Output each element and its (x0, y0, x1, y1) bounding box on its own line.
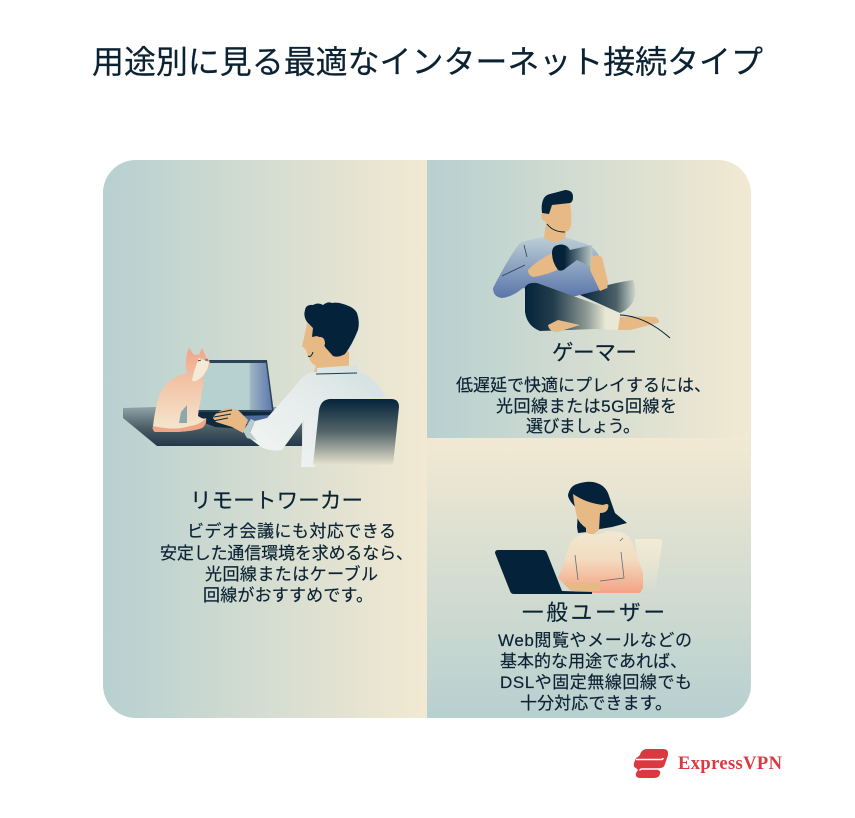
text: gamer body: 低遅延で快適にプレイするには、 (456, 376, 711, 395)
wordmark: ExpressVPN (678, 754, 783, 774)
office chair (313, 399, 399, 465)
icon: ExpressVPN mark (634, 749, 668, 778)
man (302, 323, 349, 372)
logo: ExpressVPN (634, 749, 783, 778)
panel: card background (103, 160, 751, 718)
text: remote worker body: 光回線またはケーブル (205, 564, 378, 584)
panel: gamer (456, 190, 711, 436)
heading: general user: 一般ユーザー (522, 601, 665, 625)
cat (153, 348, 210, 432)
text: general user body: 基本的な用途であれば、 (500, 652, 687, 671)
panel: remote worker (123, 302, 413, 605)
illustration: woman with laptop (495, 482, 662, 594)
text: general user body: 十分対応できます。 (520, 694, 672, 713)
illustration: gamer sitting (493, 190, 670, 338)
illustration: remote worker with cat (123, 302, 399, 467)
text: remote worker body: 安定した通信環境を求めるなら、 (160, 544, 413, 563)
text: remote worker body (160, 521, 413, 605)
panel: general user (495, 482, 692, 713)
text: remote worker body: 回線がおすすめです。 (203, 586, 373, 605)
heading: gamer: ゲーマー (552, 341, 637, 365)
text: general user body: Web閲覧やメールなどの (498, 631, 692, 650)
title: 用途別に見る最適なインターネット接続タイプ (92, 44, 763, 80)
text: gamer body (456, 376, 711, 436)
text: gamer body: 選びましょう。 (526, 417, 640, 436)
text: remote worker body: ビデオ会議にも対応できる (187, 521, 396, 541)
text: general user body (498, 631, 692, 713)
text: general user body: DSLや固定無線回線でも (500, 673, 692, 692)
text: gamer body: 光回線または5G回線を (496, 397, 677, 416)
heading: remote worker: リモートワーカー (190, 489, 363, 513)
